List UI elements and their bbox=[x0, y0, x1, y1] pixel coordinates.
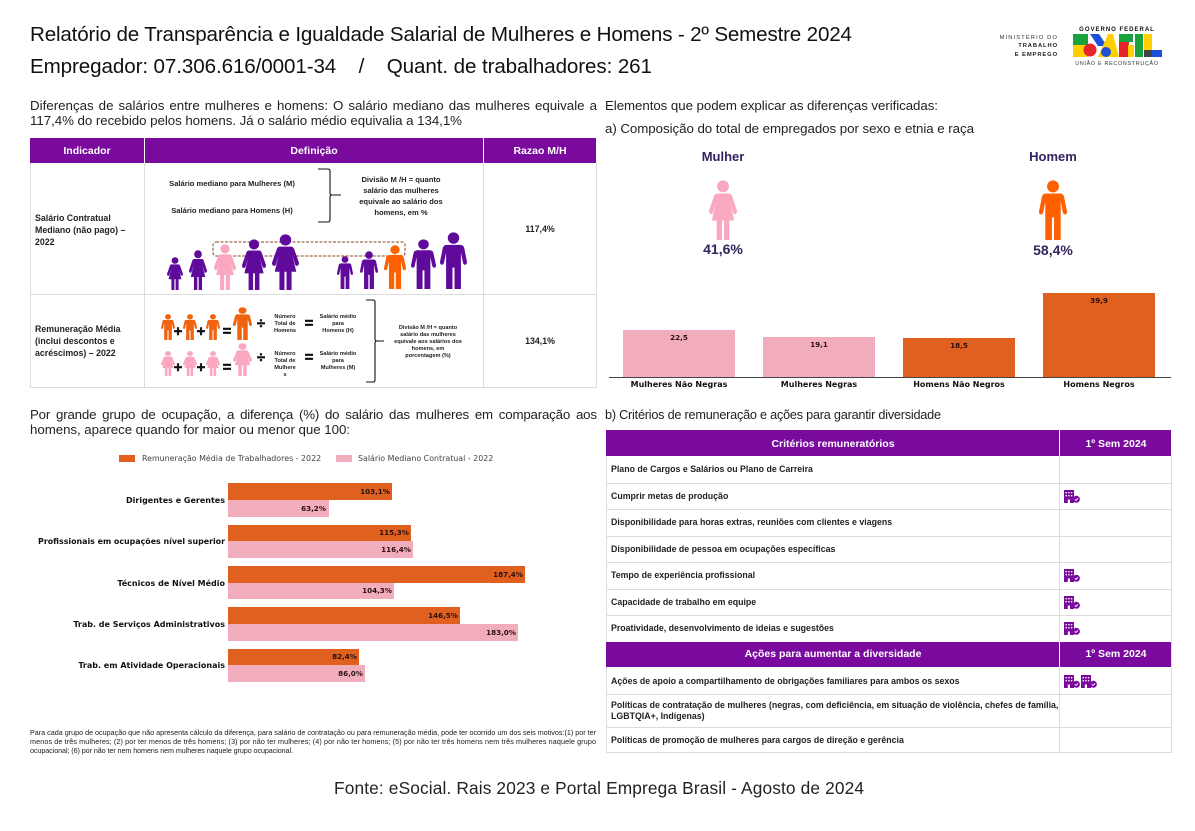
criteria rows: Cumprir metas de produção bbox=[611, 491, 729, 501]
panel: tabela critérios bbox=[606, 430, 1172, 752]
header critérios: Critérios remuneratórios bbox=[771, 438, 895, 450]
row label: remuneração média: (inclui descontos e bbox=[35, 336, 115, 346]
table header: Definição bbox=[290, 145, 338, 157]
formula: mulheres: s bbox=[283, 372, 287, 378]
chart legend: Salário Mediano Contratual - 2022 bbox=[358, 454, 493, 463]
bar chart: composição: 22,5 bbox=[670, 333, 688, 342]
formula: homens: Total de bbox=[274, 321, 296, 327]
heading right bbox=[605, 98, 975, 136]
profissionais: Profissionais em ocupações nível superior bbox=[38, 537, 225, 546]
formula: mulheres: Total de bbox=[274, 358, 296, 364]
header ações: 1º Sem 2024 bbox=[1085, 648, 1147, 660]
formula: homens: para bbox=[332, 321, 345, 327]
bar chart: composição: Homens Não Negros bbox=[913, 380, 1005, 389]
bar chart: composição: Mulheres Não Negras bbox=[631, 380, 728, 389]
criteria rows: Disponibilidade para horas extras, reuniões com clientes e viagens bbox=[611, 517, 892, 527]
division explanation 1: Divisão M /H = quanto bbox=[361, 175, 441, 184]
division explanation 1: homens, em % bbox=[374, 208, 428, 217]
division explanation 1: salário das mulheres bbox=[363, 186, 439, 195]
formula: mulheres: + bbox=[174, 359, 183, 376]
row label: remuneração média: acréscimos) – 2022 bbox=[35, 348, 116, 358]
people: men bbox=[337, 232, 467, 289]
formula: mulheres: Mulhere bbox=[274, 365, 296, 371]
formula: homens: Número bbox=[274, 314, 296, 320]
bar chart: composição: Homens Negros bbox=[1063, 380, 1135, 389]
técnicos bbox=[117, 566, 525, 599]
row label: salário contratual: Salário Contratual bbox=[35, 213, 111, 223]
técnicos: Técnicos de Nível Médio bbox=[117, 578, 225, 588]
footnote: menos de três mulheres; (2) por ter menos de três homens; (3) por não ter mulheres; (4) por não ter homens; (5) por não ter três homens nem três mulheres naquele grupo bbox=[30, 737, 596, 746]
value 134,1%: 134,1% bbox=[525, 336, 555, 346]
table header: Razao M/H bbox=[513, 145, 567, 157]
logo: governo federal bbox=[1073, 27, 1162, 67]
formula: mulheres: = bbox=[223, 359, 232, 376]
icons ações bbox=[1064, 675, 1097, 688]
heading critérios: b) Critérios de remuneração e ações para garantir diversidade bbox=[605, 408, 941, 422]
header ações: Ações para aumentar a diversidade bbox=[745, 648, 922, 660]
criteria rows: Capacidade de trabalho em equipe bbox=[611, 597, 756, 607]
header ações bbox=[606, 642, 1171, 667]
actions rows: LGBTQIA+, Indígenas) bbox=[611, 711, 705, 721]
formula: mulheres bbox=[161, 343, 357, 378]
row 1 definition labels: Salário mediano para Homens (H) bbox=[171, 206, 293, 215]
serviços administrativos: 183,0% bbox=[486, 628, 516, 637]
atividade operacionais: Trab. em Atividade Operacionais bbox=[78, 661, 225, 670]
logo: governo federal: GOVERNO FEDERAL bbox=[1079, 27, 1155, 33]
intro text left: 117,4% do recebido pelos homens. Já o salário médio equivalia a 134,1% bbox=[30, 113, 462, 128]
row label: salário contratual bbox=[35, 213, 126, 247]
formula: homens: + bbox=[197, 323, 206, 340]
actions rows: Ações de apoio a compartilhamento de obrigações familiares para ambos os sexos bbox=[611, 676, 960, 686]
intro text left: Diferenças de salários entre mulheres e homens: O salário mediano das mulheres equivale a bbox=[30, 98, 598, 113]
median highlight box bbox=[213, 242, 405, 256]
chart legend bbox=[119, 453, 493, 463]
table header: Indicador bbox=[63, 145, 111, 157]
formula: mulheres: ÷ bbox=[257, 349, 265, 366]
formula: mulheres: Número bbox=[274, 351, 296, 357]
logo: ministério: E EMPREGO bbox=[1015, 52, 1058, 58]
profissionais: 115,3% bbox=[379, 528, 409, 537]
bar chart: composição: 19,1 bbox=[810, 340, 828, 349]
formula: mulheres: + bbox=[197, 359, 206, 376]
criteria rows: Disponibilidade de pessoa em ocupações específicas bbox=[611, 544, 836, 554]
formula: mulheres: Salário médio bbox=[320, 351, 357, 357]
formula: homens: Homens (H) bbox=[322, 328, 354, 334]
panel: tabela indicadores bbox=[30, 138, 597, 388]
formula: mulheres: Mulheres (M) bbox=[321, 365, 355, 371]
formula: homens: Homens bbox=[274, 328, 296, 334]
title: Relatório de Transparência e Igualdade Salarial de Mulheres e Homens - 2º Semestre 2024 bbox=[30, 23, 852, 46]
técnicos: 104,3% bbox=[362, 586, 392, 595]
footnote: ocupacional; (6) por não ter nem homens nem mulheres naquele grupo ocupacional. bbox=[30, 746, 293, 755]
footnote bbox=[30, 728, 597, 755]
intro text ocupação bbox=[30, 407, 597, 437]
value 117,4%: 117,4% bbox=[525, 224, 555, 234]
criteria rows bbox=[611, 464, 892, 633]
division explanation 2: equivale aos salários dos bbox=[394, 339, 462, 345]
dirigentes: 63,2% bbox=[301, 504, 326, 513]
heading right: a) Composição do total de empregados por sexo e etnia e raça bbox=[605, 121, 975, 136]
footnote: Para cada grupo de ocupação que não apresenta cálculo da diferença, para salário de contratação ou para remuneração média, pode ter ocorrido um dos seis motivos:(1) por ter bbox=[30, 728, 597, 737]
intro text ocupação: homens, aparece quando for maior ou menor que 100: bbox=[30, 422, 350, 437]
division explanation 1 bbox=[359, 175, 443, 217]
row label: remuneração média bbox=[35, 324, 121, 358]
formula: homens: = bbox=[223, 323, 232, 340]
logo: governo federal: UNIÃO E RECONSTRUÇÃO bbox=[1075, 60, 1159, 67]
title bbox=[30, 23, 852, 78]
profissionais: 116,4% bbox=[381, 545, 411, 554]
serviços administrativos bbox=[73, 607, 518, 641]
division explanation 2: homens, em bbox=[412, 346, 444, 352]
bar chart: composição: 39,9 bbox=[1090, 296, 1108, 305]
formula: homens: Salário médio bbox=[320, 314, 357, 320]
row label: salário contratual: Mediano (não pago) – bbox=[35, 225, 126, 235]
row 1 definition labels bbox=[169, 179, 295, 215]
logo: ministério: TRABALHO bbox=[1018, 43, 1058, 49]
formula: mulheres: para bbox=[332, 358, 345, 364]
stat: mulher: 41,6% bbox=[703, 241, 743, 257]
bracket 1 bbox=[318, 169, 341, 222]
actions rows: Políticas de contratação de mulheres (negras, com deficiência, em situação de violência, chefes de família, bbox=[611, 700, 1058, 710]
row label: salário contratual: 2022 bbox=[35, 237, 55, 247]
division explanation 1: equivale ao salário dos bbox=[359, 197, 443, 206]
formula: homens: ÷ bbox=[257, 315, 265, 332]
division explanation 2: salário das mulheres bbox=[400, 332, 456, 338]
bar chart: composição bbox=[609, 293, 1171, 389]
division explanation 2 bbox=[394, 325, 462, 359]
logo: ministério bbox=[1000, 34, 1058, 58]
stat: homem: Homem bbox=[1029, 149, 1077, 164]
bracket 2 bbox=[366, 300, 384, 382]
formula: homens: + bbox=[174, 323, 183, 340]
dirigentes: 103,1% bbox=[360, 487, 390, 496]
row label: remuneração média: Remuneração Média bbox=[35, 324, 121, 334]
actions rows bbox=[611, 676, 1058, 745]
heading right: Elementos que podem explicar as diferenças verificadas: bbox=[605, 98, 938, 113]
atividade operacionais: 86,0% bbox=[338, 669, 363, 678]
serviços administrativos: Trab. de Serviços Administrativos bbox=[73, 620, 225, 629]
criteria rows: Plano de Cargos e Salários ou Plano de Carreira bbox=[611, 464, 813, 474]
icons critérios bbox=[1064, 490, 1080, 635]
formula: homens bbox=[161, 307, 357, 340]
criteria rows: Tempo de experiência profissional bbox=[611, 570, 755, 580]
intro text left bbox=[30, 98, 598, 128]
stat: mulher: Mulher bbox=[702, 149, 744, 164]
division explanation 2: porcentagem (%) bbox=[405, 353, 451, 359]
profissionais bbox=[38, 525, 413, 558]
chart legend: Remuneração Média de Trabalhadores - 2022 bbox=[142, 453, 321, 463]
criteria rows: Proatividade, desenvolvimento de ideias e sugestões bbox=[611, 623, 834, 633]
title: Empregador: 07.306.616/0001-34 / Quant. de trabalhadores: 261 bbox=[30, 55, 652, 78]
source: Fonte: eSocial. Rais 2023 e Portal Emprega Brasil - Agosto de 2024 bbox=[334, 778, 864, 798]
stat: homem bbox=[1029, 149, 1077, 258]
people: women bbox=[167, 234, 299, 290]
bar chart: composição: 18,5 bbox=[950, 341, 968, 350]
division explanation 2: Divisão M /H = quanto bbox=[399, 325, 458, 331]
dirigentes bbox=[126, 483, 392, 517]
actions rows: Políticas de promoção de mulheres para cargos de direção e gerência bbox=[611, 735, 904, 745]
intro text ocupação: Por grande grupo de ocupação, a diferença (%) do salário das mulheres em comparação aos bbox=[30, 407, 597, 422]
header critérios bbox=[606, 430, 1171, 456]
stat: mulher bbox=[702, 149, 744, 257]
stat: homem: 58,4% bbox=[1033, 242, 1073, 258]
bar chart: composição: Mulheres Negras bbox=[781, 380, 857, 389]
formula: homens: = bbox=[305, 315, 314, 332]
dirigentes: Dirigentes e Gerentes bbox=[126, 496, 225, 505]
bar chart: ocupação bbox=[38, 483, 525, 682]
table header bbox=[30, 138, 596, 163]
serviços administrativos: 146,5% bbox=[428, 611, 458, 620]
atividade operacionais: 82,4% bbox=[332, 652, 357, 661]
técnicos: 187,4% bbox=[493, 570, 523, 579]
header critérios: 1º Sem 2024 bbox=[1085, 438, 1147, 450]
formula: mulheres: = bbox=[305, 349, 314, 366]
row 1 definition labels: Salário mediano para Mulheres (M) bbox=[169, 179, 295, 188]
atividade operacionais bbox=[78, 649, 365, 682]
logo: ministério: MINISTÉRIO DO bbox=[1000, 34, 1058, 41]
